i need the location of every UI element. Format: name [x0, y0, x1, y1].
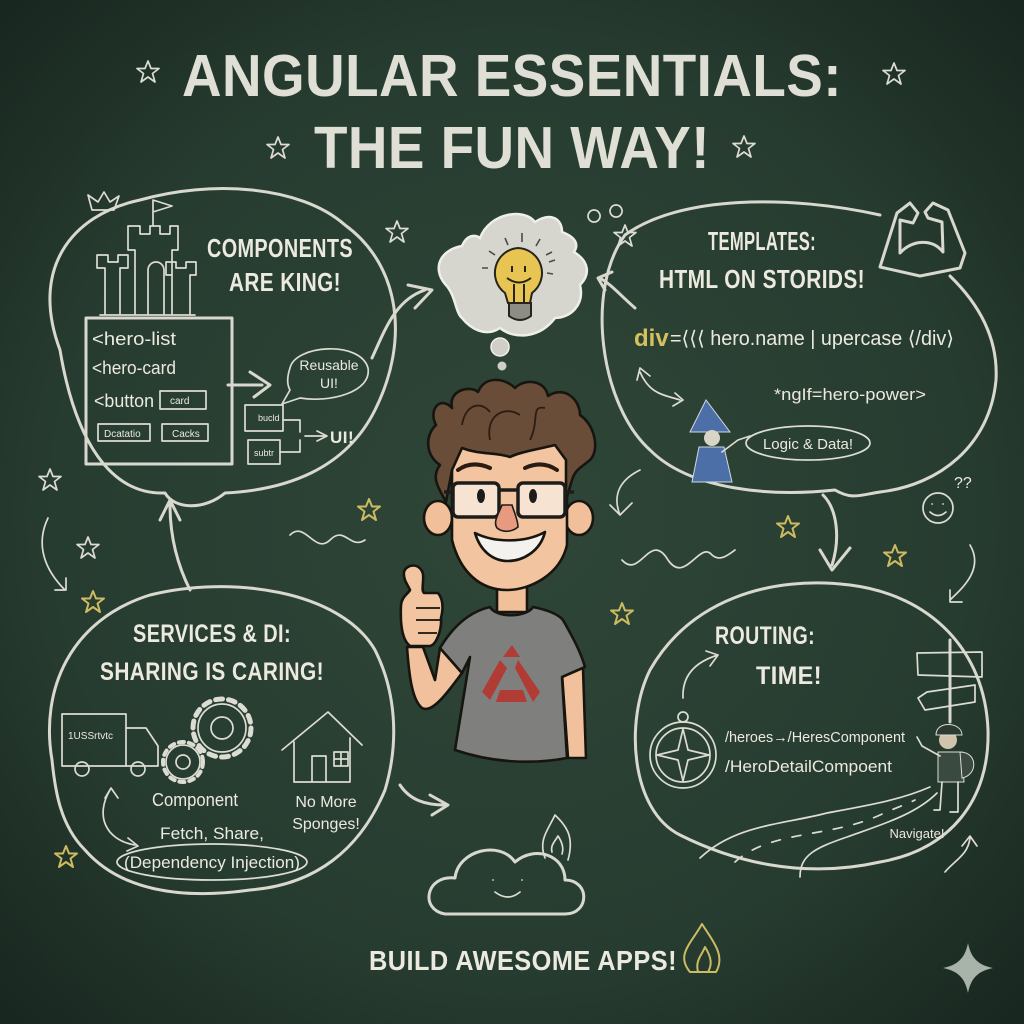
eyebrows	[458, 464, 557, 470]
icon: wizard	[690, 400, 750, 482]
label: component: Component	[152, 790, 238, 810]
icon: castle	[97, 200, 196, 315]
title: THE FUN WAY!	[314, 115, 710, 181]
nose	[496, 505, 518, 531]
cloud with flame	[429, 815, 584, 914]
panel: components: bucld	[258, 413, 280, 423]
small component boxes	[245, 405, 327, 464]
face	[452, 440, 567, 590]
doodle: stars	[39, 221, 906, 867]
arrow to reusable	[228, 372, 270, 397]
panel: routing: TIME!	[756, 662, 822, 690]
title: ANGULAR ESSENTIALS:	[182, 43, 842, 109]
road	[700, 787, 937, 877]
eyes	[477, 489, 485, 503]
heading: SERVICES & DI:	[133, 620, 291, 648]
neck	[497, 585, 527, 612]
smile	[475, 532, 545, 561]
icon: flexed arm	[880, 203, 965, 276]
route text: /heroes→/HeresComponent	[725, 729, 906, 746]
thumbs up hand	[401, 566, 443, 646]
sparkle watermark	[943, 943, 993, 993]
icon: bulb	[482, 233, 555, 320]
label: UI: UI!	[330, 428, 354, 447]
left arm	[407, 647, 462, 709]
icon: truck	[62, 714, 158, 776]
label: dependency injection	[117, 844, 307, 880]
directive text: *ngIf=hero-power>	[774, 385, 926, 404]
icon: house	[282, 712, 362, 782]
code window: Cacks	[172, 429, 200, 440]
code line: div	[634, 325, 669, 352]
glasses	[444, 483, 574, 517]
heading: ROUTING:	[715, 622, 815, 650]
code window	[86, 318, 232, 464]
label: navigate: Navigate!	[890, 826, 944, 841]
bubble outline	[49, 587, 394, 894]
panel: services: SHARING IS CARING!	[100, 658, 324, 686]
code window: <hero-list	[92, 329, 176, 349]
label: dependency injection: (Dependency Injection)	[124, 853, 300, 872]
icon: gears	[163, 699, 251, 782]
footer text: BUILD AWESOME APPS!	[369, 945, 677, 976]
panel: routing: /HeroDetailCompoent	[725, 757, 892, 776]
thought cloud with light bulb	[439, 214, 587, 370]
code window: card	[170, 396, 189, 407]
icon: smiley	[923, 493, 953, 523]
panel: templates	[602, 202, 996, 496]
panel: services: 1USSrtvtc	[68, 731, 113, 742]
title	[182, 43, 842, 181]
bubble outline	[602, 202, 996, 496]
panel: components	[50, 189, 395, 506]
callout: reusable UI: Reusable	[299, 357, 359, 373]
right arm	[562, 668, 586, 758]
panel: templates: HTML ON STORIDS!	[659, 264, 865, 294]
code line: =⟨⟨⟨ hero.name | upercase ⟨/div⟩	[670, 328, 954, 350]
hair	[428, 380, 595, 502]
panel: services	[49, 587, 394, 894]
character	[401, 380, 595, 762]
logo on shirt	[482, 645, 540, 702]
bubble outline	[50, 189, 395, 506]
heading: TEMPLATES:	[708, 226, 816, 256]
icon: explorer	[917, 724, 974, 812]
icon: crown	[88, 192, 119, 210]
code window: <hero-card	[92, 358, 176, 378]
doodle: squiggles	[290, 205, 735, 568]
callout: logic and data: Logic & Data!	[763, 436, 853, 453]
callout: reusable UI	[282, 349, 368, 404]
title stars	[137, 61, 905, 158]
callout: reusable UI: UI!	[320, 375, 338, 391]
heading: COMPONENTS	[207, 233, 353, 263]
icon: footer flame	[684, 924, 719, 972]
connector arrows	[42, 272, 975, 815]
question marks: ??	[954, 475, 972, 492]
callout: logic and data	[746, 426, 870, 460]
label: no more sponges: No More	[295, 794, 357, 811]
hair curls	[462, 406, 545, 440]
code window: <button	[94, 391, 154, 411]
panel: components: ARE KING!	[229, 267, 341, 297]
icon: compass	[650, 712, 716, 788]
panel: components: subtr	[254, 448, 274, 458]
code window: Dcatatio	[104, 429, 141, 440]
ears	[424, 501, 452, 535]
panel: routing	[635, 583, 988, 877]
icon: signpost	[917, 640, 982, 722]
label: fetch share: Fetch, Share,	[160, 824, 264, 843]
torso	[440, 607, 585, 762]
panel: services: Sponges!	[292, 816, 360, 833]
bubble outline	[635, 583, 988, 869]
